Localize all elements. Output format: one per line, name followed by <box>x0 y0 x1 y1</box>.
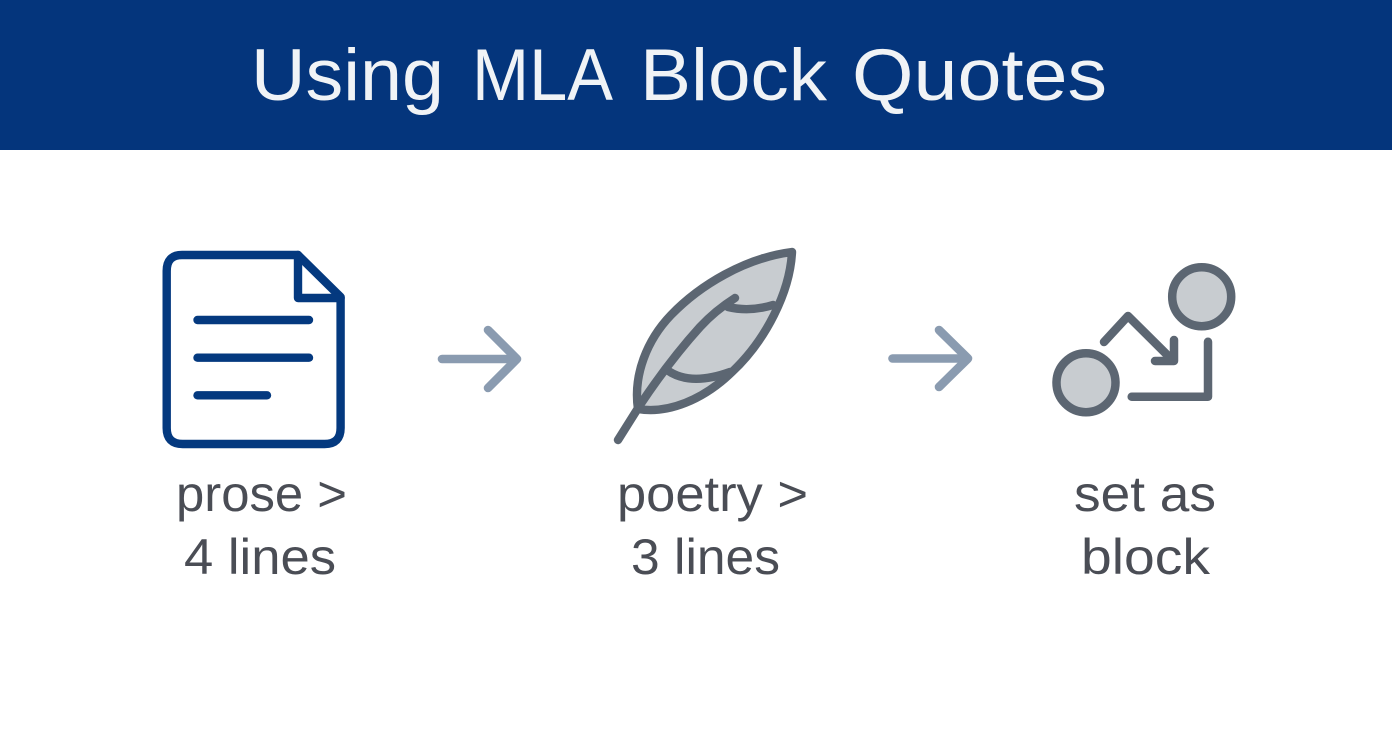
title: Block <box>640 35 828 116</box>
label: prose <box>176 466 347 585</box>
label: poetry: 3 lines <box>631 529 780 585</box>
title: Using <box>251 35 444 116</box>
label: set as block <box>1074 466 1216 585</box>
icon: block flow <box>1056 267 1231 412</box>
label: poetry <box>617 466 808 585</box>
icon: document <box>167 255 341 444</box>
arrow: prose to poetry <box>442 330 517 388</box>
label: prose: 4 lines <box>184 529 336 585</box>
title: MLA <box>472 35 613 116</box>
title <box>251 35 1107 116</box>
label: set as block: block <box>1081 529 1211 585</box>
label: poetry: poetry > <box>617 466 808 522</box>
label: set as block: set as <box>1074 466 1216 522</box>
arrow: poetry to block <box>892 330 968 387</box>
title banner <box>0 0 1392 150</box>
icon: feather <box>618 252 792 440</box>
label: prose: prose > <box>176 466 347 522</box>
title: Quotes <box>852 35 1107 116</box>
